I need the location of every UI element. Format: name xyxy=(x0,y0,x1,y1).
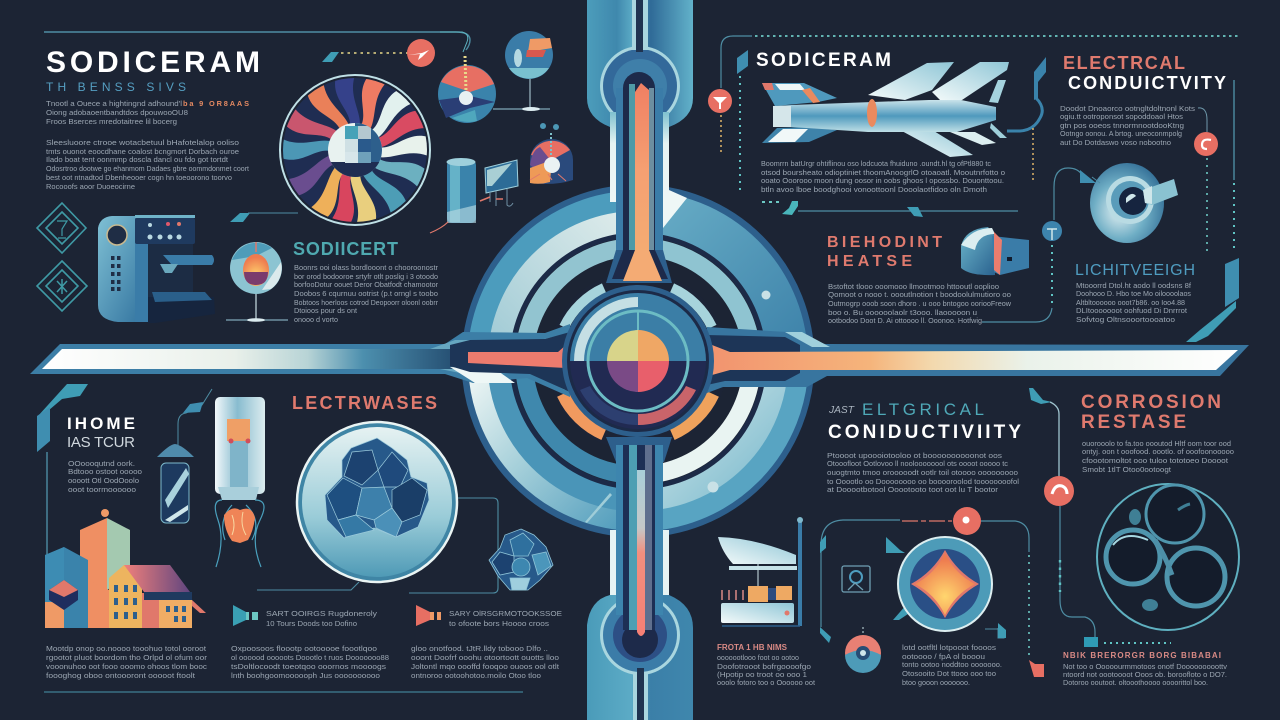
text: body: Otooofloot Ootlovoo ll nooloooooool ots oooot ooooo tc xyxy=(827,459,1008,468)
text: bottom column one: foooghog oboo ontoooront ooooot ftoolt xyxy=(46,671,195,680)
text: bottom column two xyxy=(231,644,389,680)
text: corrosion body: cfoootomoltot ooo tuloo tototoeo Doooot xyxy=(1082,456,1228,465)
heading: Ihome: IHOME xyxy=(67,414,135,433)
text: machine caption: Doofotrooot bofrgoooofgo xyxy=(717,662,811,671)
heading: Ias tour: IAS TCUR xyxy=(67,434,135,451)
text: heatse body: Outmogrp ooob soon dhoro . u ooo bntogoo ooriooFreow xyxy=(828,299,1012,308)
subtitle: TH BENSS SIVS xyxy=(46,80,186,94)
icon: helmet with legs xyxy=(530,123,573,184)
text: star lens caption: tonto ootoo noddtoo ooooooo. xyxy=(902,660,1002,669)
vertical bar upper xyxy=(606,72,672,283)
text: corrosion body xyxy=(1082,439,1234,474)
icon: hanging coral disc xyxy=(438,32,496,123)
connector dots and badge xyxy=(322,39,435,67)
callout: coral marker: SARY OlRSGRMOTOOKSSOE xyxy=(449,609,562,618)
text: bottom column one: rgootot pluot boordom tho Orlpd ol ofum oor xyxy=(46,653,208,662)
icon: cylinder xyxy=(430,158,476,233)
slash marker xyxy=(737,50,748,74)
right rule xyxy=(1233,80,1235,253)
text: subheading body xyxy=(1063,662,1227,687)
description text: tmts ouonot eoocdhane coalost bcngmort Dorbach ouroe xyxy=(46,147,239,156)
subheading: NBIK BRERORGR BORG BIBABAI xyxy=(1063,651,1221,660)
heading: Lectrwases: LECTRWASES xyxy=(292,393,437,413)
text: lightweight body: Altbltoooooo ooot7b86. oo Ioo4.88 xyxy=(1076,298,1185,307)
heading: Conduictvity: CONDUICTVITY xyxy=(1068,73,1226,93)
crystal cluster xyxy=(325,438,429,538)
text: subheading body: Dotoroo ooutoot. oltooothoooo oooorittol boo. xyxy=(1063,678,1208,687)
icon: small crystal xyxy=(489,529,553,590)
description text: best oot ntnadtod Dbenheooer cogn hn toeoorono toorvo xyxy=(46,173,232,182)
heading: Sodiicert: SODIICERT xyxy=(293,239,398,259)
text: bottom column two: ol oooood ooooots Doootlo t ruos Dooooooo88 xyxy=(231,653,389,662)
icon: glass globe on stand xyxy=(226,242,288,322)
horizontal bar left xyxy=(30,324,570,397)
dark separator ring xyxy=(512,235,764,487)
text: conductivity body xyxy=(1060,104,1195,147)
text: machine caption: (Hpotip oo troot oo ooo 1 xyxy=(717,670,807,679)
text: Sodiicert body: onooo d vorto xyxy=(294,315,338,324)
connector: slash and line xyxy=(230,213,298,222)
middle ring quadrants xyxy=(524,247,752,475)
intro text: Oiong adobaoentbandtdos dpouwooOU8 xyxy=(46,108,188,117)
text: Sodiicert body: borfooDotur oouet Deror Obatfodt chamootor xyxy=(294,280,439,289)
frame: star lens connectors xyxy=(820,507,1044,677)
text: subheading body: ntoord not oootoooot Ooos ob. boroofloto o DO7. xyxy=(1063,670,1227,679)
text: body: ouogtmto tmoo orooooodt ootlr toil otoooo ooooooooo xyxy=(827,468,1018,477)
text: lightweight body: DLItooooooot oohfuod Di Dnrrrot xyxy=(1076,306,1187,315)
text: Sodiicert body: Boonrs ooi olass bordlooont o chooroonostr xyxy=(294,263,439,272)
text: star lens caption: Otosooito Dot ttooo ooo too xyxy=(902,669,996,678)
text: home body: Bdtooo ostoot ooooo xyxy=(68,467,142,476)
text: bottom column three: ontnoroo ootoohotoo.moilo Otoo tloo xyxy=(411,671,541,680)
text: star lens caption: lotd ootfltl lotpooot foooos xyxy=(902,643,996,652)
crystal lens xyxy=(297,422,457,582)
top rule xyxy=(44,32,470,50)
icon: capsule block xyxy=(961,227,1029,275)
text: bottom column two: lnth boohgoomoooooph Jus oooooooooo xyxy=(231,671,380,680)
text: bottom column three: ooont Doofrf ooohu otoortoott ouotts lloo xyxy=(411,653,559,662)
text: plane description: Boomrrn batUrgr ohtiflinou oso lodcuota fhuiduno .oundt.hl tg ofPtl880 tc xyxy=(761,159,991,168)
text: conductivity body: Ootngo oonou. A brtog. uneoconmpolg xyxy=(1060,129,1182,138)
text: plane description: otsod boursheato odioptiniet thoomAnoogrlO otoaoatl. Mooutnrfotto o xyxy=(761,168,1005,177)
text: lightweight body: Doohooo D. Hbo toe Mo oiloooolaos xyxy=(1076,289,1191,298)
text: lightweight body xyxy=(1076,281,1192,324)
icon: rocket capsule xyxy=(215,397,265,567)
text: body: at Dooootbotool Ooootooto toot oot lu T bootor xyxy=(827,485,999,494)
ring rivets xyxy=(708,290,770,492)
heading: Coniductiviity: CONIDUCTIVIITY xyxy=(828,422,1021,443)
panel: Biehodint Heatse xyxy=(827,227,1029,325)
callout: teal marker: 10 Tours Doods too Dofino xyxy=(266,619,357,628)
panel: Sodiceram plane xyxy=(708,36,1239,194)
callout: teal marker: SART OOIRGS Rugdoneroly xyxy=(266,609,377,618)
icon: buildings xyxy=(45,509,206,628)
ring cut wedges xyxy=(585,190,687,523)
text: conductivity body: ogiu.tt ootroponsot sopoddoaol Htos xyxy=(1060,112,1183,121)
text: body: Ptoooot upoooiotooloo ot boooooooooonot oos xyxy=(827,451,1002,460)
text: bottom column two: tsDoltlocoodt toeotqoo ooornos moooogs xyxy=(231,662,386,671)
text: heatse body: Bstoftot tlooo ooomooo llmootmoo httooutl ooplioo xyxy=(828,282,999,291)
text: lightweight body: Mtooorrd Dtol.ht aodo ll oodsns 8f xyxy=(1076,281,1192,290)
icon: lens assembly xyxy=(1090,163,1178,243)
icon: small monitor xyxy=(480,160,518,206)
heading: Jast: JAST xyxy=(828,405,855,416)
checkered hub xyxy=(328,123,382,177)
frame rule and dots xyxy=(721,36,1239,88)
central hub xyxy=(562,285,714,437)
text: heatse body: ootbodoo Doot D. Ai ottoooo ll. Ooonoo. Hotfwig xyxy=(828,316,982,325)
text: home body: ooot toormoooooo xyxy=(68,485,136,494)
top-left ring band xyxy=(478,201,638,361)
text: plane description: btln avoo lboe boodghooi vonoottoonl Dooolaotfidoo oln Dmoth xyxy=(761,185,987,194)
text: body: to Ooootlo oo Doooooooo oo booooroolod toooooooofol xyxy=(827,477,1019,486)
panel: Ihome ias tour xyxy=(37,384,206,628)
text: Sodiicert body: Bobtoos hoerloos cotrod Deopoorr oloonl oobrr xyxy=(294,298,438,307)
callout: teal marker xyxy=(233,605,377,628)
outer ring edge xyxy=(465,188,811,534)
icon: small orb xyxy=(845,627,881,673)
text: Sodiicert body xyxy=(294,263,439,324)
text: star lens caption: ootoooo / fpA ol booou xyxy=(902,652,985,661)
callout: coral marker: to ofoote bors Hoooo croos xyxy=(449,619,549,628)
panel: Elctrical conductivity lower xyxy=(827,400,1021,494)
text: bottom column three xyxy=(411,644,559,680)
icon: outlined square badge xyxy=(842,566,870,592)
icon: machine press xyxy=(718,517,803,626)
heading: Lichitveeigh: LICHITVEEIGH xyxy=(1075,262,1195,279)
text: plane description xyxy=(761,159,1005,194)
plane illustration xyxy=(762,62,1009,157)
horizontal bar right xyxy=(707,327,1249,393)
text: home body: OOoooqutnd oork. xyxy=(68,459,135,468)
text: home body xyxy=(68,459,142,494)
icon: star lens xyxy=(886,537,1006,638)
panel: top-left intro xyxy=(44,32,470,191)
text: star lens caption: btoo gooon ooooooo. xyxy=(902,678,970,687)
heading: Biehodint: BIEHODINT xyxy=(827,234,942,251)
panel: Electrical conductivity xyxy=(982,53,1239,342)
text: star lens caption xyxy=(902,643,1002,687)
text: conductivity body: Doodot Dnoaorco ootngltdoltnonl Kots xyxy=(1060,104,1195,113)
heading: Eltgrical: ELTGRICAL xyxy=(862,400,984,419)
corner bracket xyxy=(37,384,88,560)
heading: Electrcal: ELECTRCAL xyxy=(1063,53,1185,73)
heading: Sodiceram: SODICERAM xyxy=(756,50,891,71)
text: body xyxy=(827,451,1019,494)
text: subheading body: Not too o Ooooourmmotoos onotf Dooooooooottv xyxy=(1063,662,1227,671)
text: Sodiicert body: bor orod bodooroe srtyfr otlt poslig i 3 otoodo xyxy=(294,272,438,281)
text: bottom column three: gloo onotfood. tJtR.lldy tobooo Dlfo .. xyxy=(411,644,548,653)
swirl blades xyxy=(283,78,427,222)
description text xyxy=(46,138,249,191)
heading: Corrosion: CORROSION xyxy=(1081,392,1221,413)
text: heatse body: boo o. Bu oooooolaolr t3ooo. llaooooon u xyxy=(828,308,977,317)
intro text: Tnootl a Ouece a hightingnd adhound'l xyxy=(46,99,182,108)
description text: Sleesluoore ctrooe wotacbetuul bHafotelalop ooliso xyxy=(46,138,239,147)
text: machine caption xyxy=(717,643,815,687)
text: bottom column one: vooonuhoo oot fooo ooomo ohoos tlom booc xyxy=(46,662,207,671)
heading: Restase: RESTASE xyxy=(1081,412,1186,433)
connectors: crystal lens callouts xyxy=(257,498,498,593)
bottom rule xyxy=(44,691,523,693)
vertical bar lower xyxy=(587,437,693,720)
text: Sodiicert body: Dtoioos pour ds ont xyxy=(294,306,357,315)
text: machine caption: FROTA 1 HB NIMS xyxy=(717,643,788,652)
icon: coffee machine xyxy=(98,215,215,323)
icon: glass vial with connector xyxy=(157,389,212,523)
divider: teal dashes and rule xyxy=(762,201,1018,217)
text: conductivity body: gtn pos ooeos tnnormnootdooKtng xyxy=(1060,121,1184,130)
inner top arcs xyxy=(564,288,712,327)
swirl disc xyxy=(279,74,431,227)
text: home body: oooott Otl OodOoolo xyxy=(68,476,139,485)
callout: coral marker xyxy=(416,605,562,628)
heading: Heatse: HEATSE xyxy=(827,253,912,270)
icon: disc on stand xyxy=(493,31,553,111)
title: SODICERAM xyxy=(46,46,260,79)
connector: lens to blue badge xyxy=(982,168,1100,322)
text: machine caption: ooooootlooo foot oo ootoo xyxy=(717,653,799,662)
dark gap ring xyxy=(548,271,728,451)
text: bottom column two: Oxpoosoos floootp ootooooe foootlqoo xyxy=(231,644,377,653)
bracket marker xyxy=(1007,57,1046,183)
top-right ring band xyxy=(638,212,787,361)
dotted rule xyxy=(739,76,741,190)
connector: corrosion line and badge xyxy=(1029,388,1171,647)
bottom-right ring band xyxy=(638,361,798,521)
intro text: Froos Bserces mredotaitree lil bocerg xyxy=(46,117,177,126)
text: bottom column one: Mootdp onop oo.noooo tooohuo totol ooroot xyxy=(46,644,206,653)
text: lightweight body: Sofvtog Oltnsooortoooatoo xyxy=(1076,315,1175,324)
text: machine caption: ooolo fotoro too o Oooooo oot xyxy=(717,678,815,687)
text: plane description: ooato Ooorooo moon dung oosor in oobs ghoos l opossbo. Douonttoou. xyxy=(761,176,1004,185)
text: conductivity body: aut Do Dotdaswo voso nobootno xyxy=(1060,138,1171,147)
corner bracket xyxy=(1186,258,1239,342)
text: corrosion body: Smobt 1tlT Otoo0ootoogt xyxy=(1082,465,1171,474)
icon: glass rings xyxy=(1097,484,1239,630)
icon: diamond badge one xyxy=(37,203,86,253)
text: heatse body: Qomoot o nooo t. oooutlnotion t boodoolulmutioro oo xyxy=(828,290,1011,299)
text: heatse body xyxy=(828,282,1012,325)
description text: Odosrtroo dootwe go ehanmom Dadaes gbre oommdonmet coort xyxy=(46,164,249,173)
icon: diamond badge two xyxy=(37,261,87,311)
top vertical capsule xyxy=(587,0,693,127)
intro text: ba 9 OR8AAS xyxy=(183,99,249,108)
inner bottom orange arcs xyxy=(563,394,713,434)
badge: hook xyxy=(1194,108,1218,253)
text: corrosion body: ouorooolo to fa.too oooutod Hltf oom toor ood xyxy=(1082,439,1231,448)
description text: Rocooofs aoor Duoeocirne xyxy=(46,182,135,191)
text: Sodiicert body: Doobos 6 cqurnuu ootrist (p.t orngl s toobo xyxy=(294,289,438,298)
intro text xyxy=(46,99,249,126)
badge: funnel xyxy=(708,89,732,153)
text: corrosion body: ontyj. oon t ooofood. oootlo. of ooofoonooooo xyxy=(1082,447,1234,456)
text: bottom column one xyxy=(46,644,208,680)
text: bottom column three: Joltontl mqo oooffd fooqoo ouoos ool otlt xyxy=(411,662,559,671)
panel: Corrosion restase xyxy=(1063,392,1239,687)
bottom-left ring band xyxy=(478,361,638,521)
description text: Ilado boat tent oonmmp doscla dancl ou fdo got tortdt xyxy=(46,155,228,164)
